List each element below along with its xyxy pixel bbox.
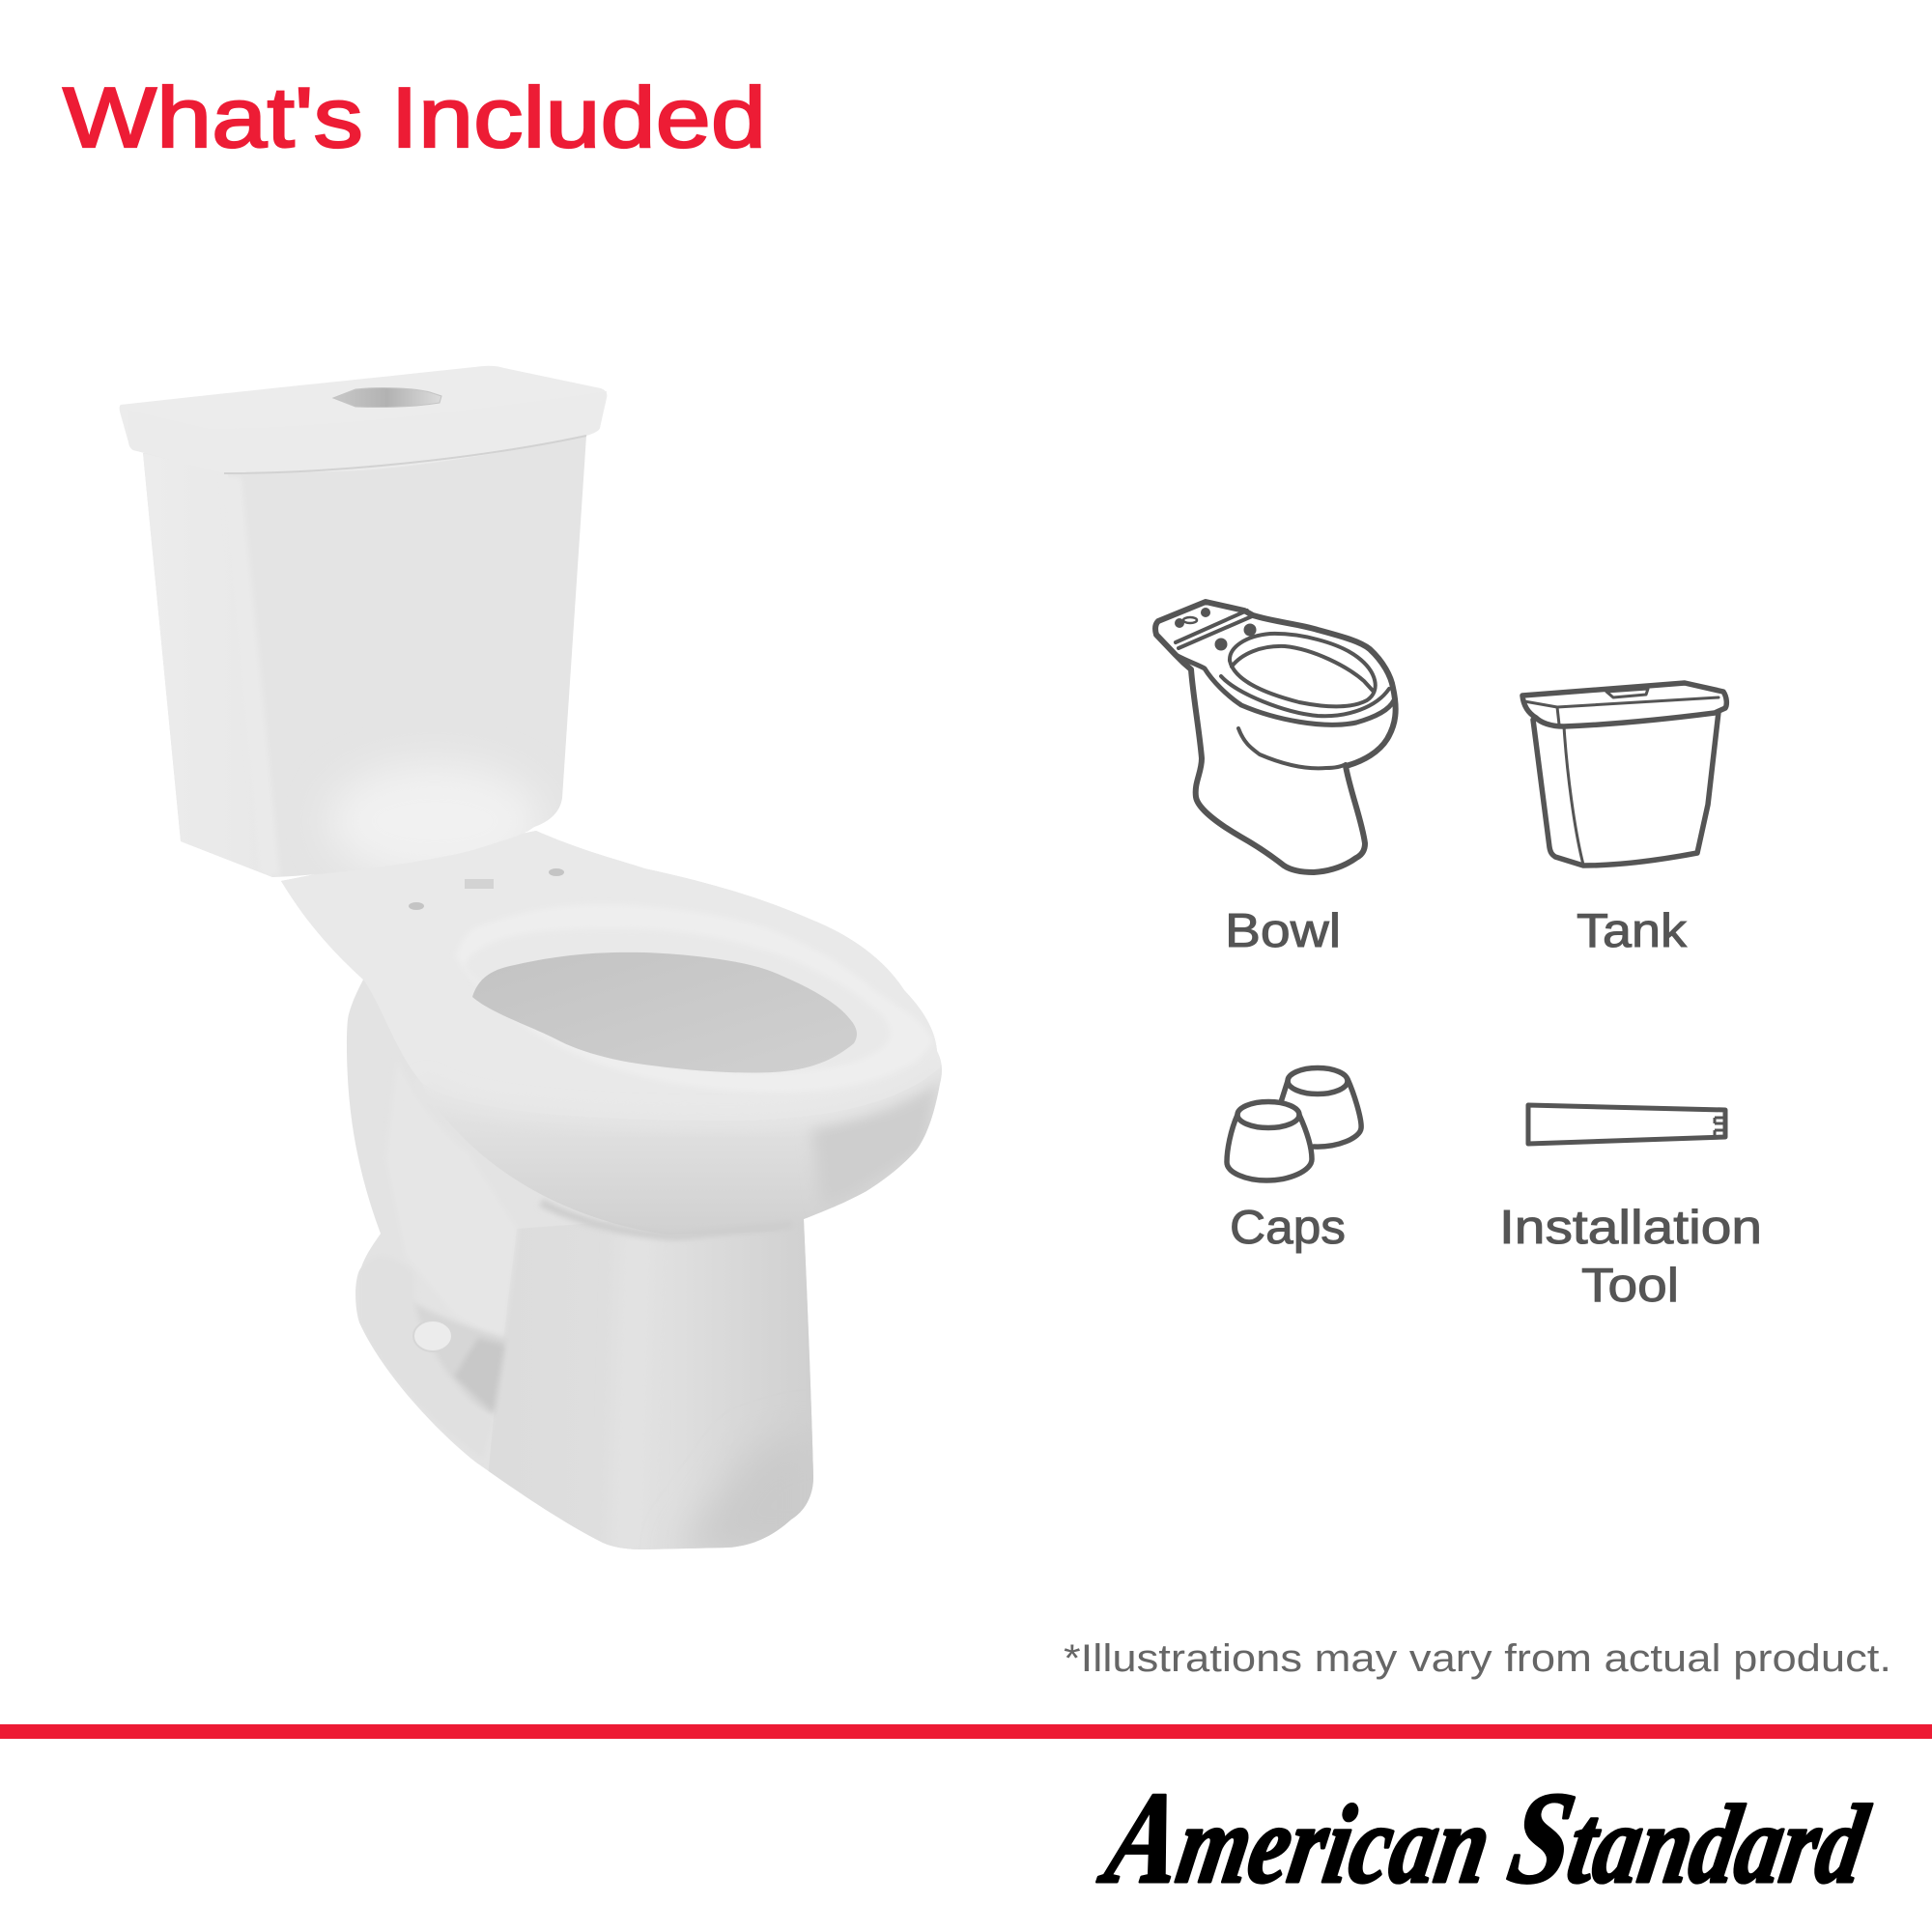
item: caps — [1227, 1068, 1361, 1254]
bolt cap — [413, 1321, 452, 1351]
brand logo: American Standard — [1091, 1765, 1880, 1911]
label: Installation Tool: Tool — [1581, 1260, 1679, 1312]
label: Installation Tool: Installation — [1499, 1202, 1762, 1254]
icon: tank — [1522, 683, 1726, 866]
label: Caps: Caps — [1230, 1202, 1346, 1254]
deck and rim — [281, 831, 940, 1121]
product photo: toilet — [120, 366, 942, 1555]
title: What's Included — [63, 70, 766, 165]
bowl opening — [472, 952, 857, 1073]
item: tank — [1522, 683, 1726, 957]
label: Bowl: Bowl — [1225, 905, 1341, 957]
flush button — [333, 388, 441, 408]
tank — [120, 366, 607, 879]
item: bowl — [1155, 602, 1396, 957]
toilet bowl — [281, 831, 942, 1555]
red divider bar — [0, 1724, 1932, 1739]
disclaimer note: *Illustrations may vary from actual product. — [1064, 1637, 1891, 1680]
item: installation tool — [1499, 1105, 1762, 1312]
icon: installation tool — [1528, 1105, 1725, 1144]
icon: caps — [1227, 1068, 1361, 1180]
icon: bowl — [1155, 602, 1396, 872]
seat mounting holes — [409, 902, 424, 910]
label: Tank: Tank — [1577, 905, 1688, 957]
small brand mark — [465, 879, 494, 889]
label: Installation Tool — [1499, 1202, 1762, 1312]
